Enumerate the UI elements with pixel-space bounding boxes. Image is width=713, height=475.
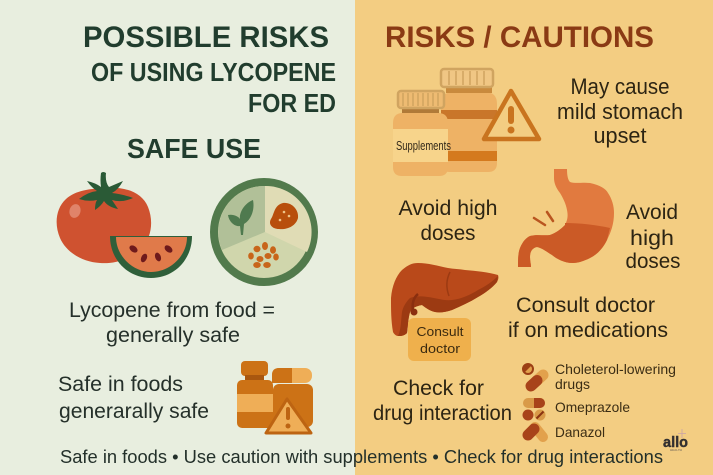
icon: bottles with warning — [237, 361, 313, 433]
text: avoid high doses right — [626, 201, 680, 273]
text: lycopene from food: generally safe — [106, 324, 240, 347]
logo: allo health: HEALTH — [670, 448, 682, 452]
title: FOR ED — [248, 88, 336, 118]
callout: consult doctor tag — [408, 318, 471, 361]
text: lycopene from food — [69, 299, 275, 347]
text: may cause mild stomach upset: mild stomach — [557, 99, 683, 124]
logo: allo health: allo — [663, 434, 688, 451]
text: drug list: Omeprazole — [555, 399, 630, 415]
text: safe in foods: Safe in foods — [58, 373, 183, 396]
text: avoid high doses right: high — [630, 227, 674, 250]
icon: liver — [391, 263, 498, 361]
icon: stomach — [518, 169, 614, 267]
text: avoid high doses left: doses — [420, 222, 476, 245]
text: supplements label: Supplements — [396, 138, 451, 153]
text: avoid high doses left — [398, 197, 498, 245]
text: check for drug interaction: Check for — [393, 377, 484, 400]
callout: consult doctor tag: doctor — [420, 341, 461, 356]
icon: tomato — [57, 172, 151, 263]
title — [83, 21, 336, 118]
icon: watermelon slice — [110, 236, 192, 278]
text: check for drug interaction: drug interaction — [373, 402, 512, 425]
text: safe in foods: generarally safe — [59, 400, 209, 423]
icon: warning triangle — [484, 91, 539, 139]
callout: consult doctor tag: Consult — [416, 324, 464, 339]
text: consult doctor if on medications: if on medications — [508, 319, 668, 342]
text: may cause mild stomach upset: upset — [594, 123, 646, 148]
icon: supplement bottles with warning — [393, 69, 539, 176]
icon: pills — [522, 364, 546, 437]
panel: risks background — [355, 0, 713, 475]
footer strip: Safe in foods • Use caution with supplements • Check for drug interactions — [60, 447, 663, 467]
text: avoid high doses right: Avoid — [626, 201, 678, 224]
text: may cause mild stomach upset — [557, 74, 683, 148]
heading: risks / cautions: RISKS / CAUTIONS — [385, 21, 654, 54]
text: avoid high doses right: doses — [626, 250, 680, 273]
text: drug list: drugs — [555, 376, 590, 392]
text: check for drug interaction — [373, 377, 512, 425]
text: avoid high doses left: Avoid high — [398, 197, 498, 220]
text: consult doctor if on medications — [508, 294, 668, 342]
text: lycopene from food: Lycopene from food = — [69, 299, 275, 322]
panel: safe use background — [0, 0, 356, 475]
text: may cause mild stomach upset: May cause — [570, 74, 670, 99]
icon: plate of foods — [210, 178, 318, 286]
text: drug list: Choleterol-lowering — [555, 361, 676, 377]
text: consult doctor if on medications: Consult doctor — [516, 294, 655, 317]
title: OF USING LYCOPENE — [91, 57, 336, 87]
title: POSSIBLE RISKS — [83, 21, 329, 54]
text: drug list: Danazol — [555, 424, 605, 440]
heading: safe use: SAFE USE — [127, 133, 261, 164]
text: drug list — [555, 361, 676, 440]
text: safe in foods — [58, 373, 209, 423]
